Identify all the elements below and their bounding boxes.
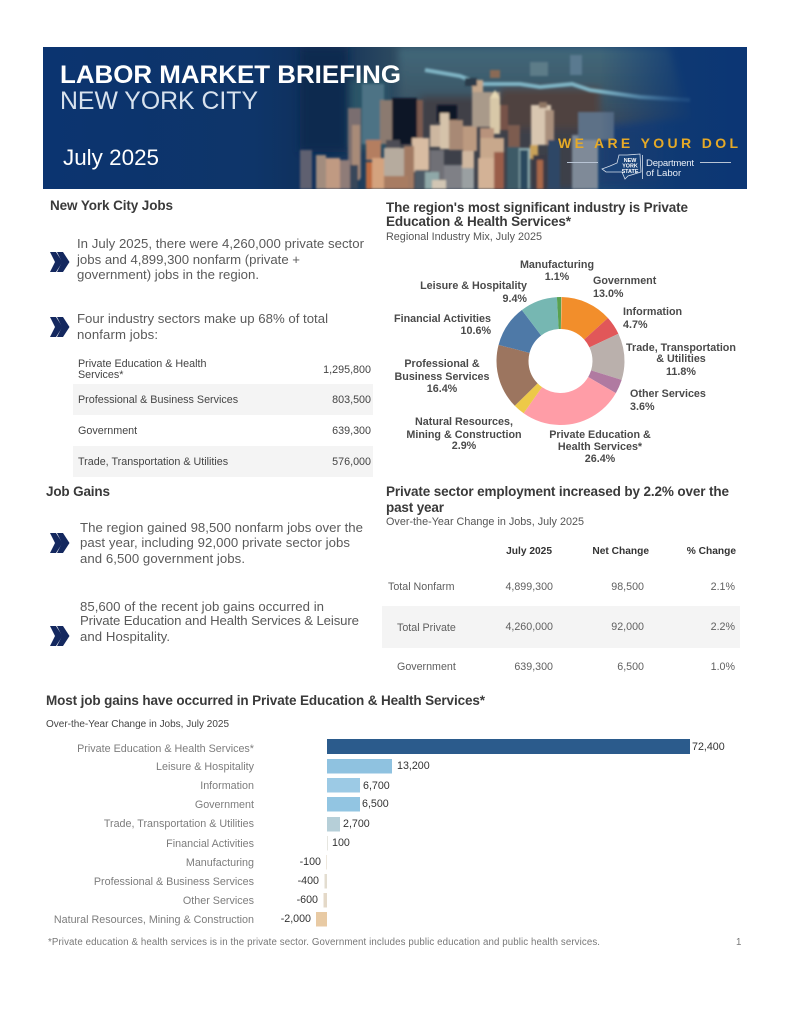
footnote: *Private education & health services is in the private sector. Government includes public education and public health services. — [48, 937, 600, 948]
donut labels: Private Education & — [549, 429, 651, 441]
table: over-the-year change: 2.1% — [711, 581, 735, 593]
panel: private sector employment — [382, 484, 740, 673]
section: New York City Jobs — [50, 198, 373, 477]
donut labels: & Utilities — [656, 353, 706, 365]
icon: chevrons — [50, 317, 70, 337]
heading: New York City Jobs — [50, 198, 173, 213]
banner date: July 2025 — [63, 145, 159, 170]
category labels: Professional & Business Services — [94, 876, 254, 888]
table: top industries: Trade, Transportation & Utilities — [78, 456, 228, 468]
text: recent job gains: and Hospitality. — [80, 629, 170, 644]
value labels: -600 — [297, 894, 318, 906]
table: top industries: 1,295,800 — [323, 364, 371, 376]
text: private and nonfarm jobs: In July 2025, there were 4,260,000 private sector — [77, 236, 365, 251]
donut labels: Manufacturing — [520, 259, 594, 271]
text: private and nonfarm jobs — [76, 236, 365, 282]
text: four industry sectors: Four industry sectors make up 68% of total — [77, 311, 328, 326]
category labels — [54, 743, 255, 926]
text: region gained jobs: and 6,500 government jobs. — [80, 551, 245, 566]
table: over-the-year change: % Change — [687, 546, 736, 557]
text: private and nonfarm jobs: government) jobs in the region. — [77, 267, 259, 282]
donut labels: 10.6% — [461, 325, 491, 337]
donut labels: Trade, Transportation — [626, 342, 736, 354]
heading: past year — [386, 500, 445, 515]
table: over-the-year change: 92,000 — [611, 621, 644, 633]
table: over-the-year change: 1.0% — [711, 661, 735, 673]
donut labels: Professional & — [404, 358, 480, 370]
logo: NY State Department of Labor: of Labor — [646, 168, 682, 179]
table: over-the-year change: Total Nonfarm — [388, 581, 455, 593]
value labels: 13,200 — [397, 760, 430, 772]
donut labels — [394, 259, 736, 465]
category labels: Private Education & Health Services* — [77, 743, 255, 755]
banner subtitle: NEW YORK CITY — [60, 87, 258, 115]
donut labels: Information — [623, 306, 682, 318]
donut labels: 16.4% — [427, 383, 458, 395]
value labels: 100 — [332, 837, 350, 849]
icon: chevrons — [50, 626, 70, 646]
donut labels: 26.4% — [585, 453, 616, 465]
table: top industries: 639,300 — [332, 425, 371, 437]
text: region gained jobs: The region gained 98,500 nonfarm jobs over the — [80, 520, 363, 535]
heading: Education & Health Services* — [386, 214, 572, 229]
logo: NY State Department of Labor: Department — [646, 158, 694, 169]
category labels: Information — [200, 780, 254, 792]
subheading: Over-the-Year Change in Jobs, July 2025 — [46, 719, 229, 730]
value labels — [281, 741, 725, 925]
logo: NY State Department of Labor — [567, 154, 731, 179]
banner — [43, 47, 747, 190]
table: over-the-year change: 2.2% — [711, 621, 735, 633]
table: over-the-year change: 98,500 — [611, 581, 644, 593]
subheading: Regional Industry Mix, July 2025 — [386, 231, 542, 243]
table: over-the-year change — [382, 546, 740, 673]
heading: Most job gains have occurred in Private Education & Health Services* — [46, 693, 486, 708]
table: over-the-year change: July 2025 — [506, 546, 552, 557]
donut chart — [512, 312, 609, 410]
text: recent job gains — [80, 599, 359, 644]
category labels: Natural Resources, Mining & Construction — [54, 914, 254, 926]
value labels: -100 — [300, 856, 321, 868]
donut labels: 13.0% — [593, 288, 624, 300]
donut labels: Mining & Construction — [406, 429, 522, 441]
text: private and nonfarm jobs: jobs and 4,899,300 nonfarm (private + — [76, 252, 300, 267]
category labels: Trade, Transportation & Utilities — [104, 818, 254, 830]
table: top industries: 576,000 — [332, 456, 371, 468]
donut labels: 9.4% — [502, 293, 527, 305]
value labels: 72,400 — [692, 741, 725, 753]
donut labels: Leisure & Hospitality — [420, 280, 527, 292]
banner photo: city skyline — [298, 47, 689, 189]
logo: NY State Department of Labor: STATE — [622, 169, 639, 175]
table: over-the-year change: 4,260,000 — [505, 621, 553, 633]
value labels: 6,500 — [362, 798, 389, 810]
table: over-the-year change: Total Private — [397, 622, 456, 634]
logo: NY State Department of Labor: NEW — [624, 158, 637, 164]
donut labels: Business Services — [394, 371, 490, 383]
text: four industry sectors — [77, 311, 328, 342]
subheading: Over-the-Year Change in Jobs, July 2025 — [386, 516, 584, 528]
table: top industries: 803,500 — [332, 394, 371, 406]
table: top industries — [73, 358, 373, 477]
value labels: -400 — [298, 875, 319, 887]
heading: The region's most significant industry is Private — [386, 200, 688, 215]
heading: Job Gains — [46, 484, 110, 499]
table: over-the-year change: Government — [397, 661, 456, 673]
text: recent job gains: Private Education and Health Services & Leisure — [80, 613, 359, 628]
bar chart — [54, 739, 725, 926]
panel: job gains by industry — [46, 693, 725, 926]
category labels: Financial Activities — [166, 838, 254, 850]
donut labels: 1.1% — [545, 271, 570, 283]
slogan: WE ARE YOUR DOL — [558, 135, 738, 151]
heading: Private sector employment increased by 2.2% over the — [386, 484, 729, 499]
table: over-the-year change: 4,899,300 — [505, 581, 553, 593]
donut labels: Other Services — [630, 388, 706, 400]
donut labels: Government — [593, 275, 657, 287]
panel: industry mix — [386, 200, 736, 465]
table: over-the-year change: 6,500 — [617, 661, 644, 673]
donut labels: Financial Activities — [394, 313, 491, 325]
heading — [386, 200, 688, 229]
value labels: 6,700 — [363, 780, 390, 792]
donut labels: Natural Resources, — [415, 416, 513, 428]
heading — [386, 484, 729, 515]
bars — [316, 739, 690, 926]
table: over-the-year change: Net Change — [592, 546, 649, 557]
logo: NY State Department of Labor: YORK — [622, 164, 638, 170]
donut labels: 2.9% — [452, 440, 477, 452]
table: top industries: Private Education & Health — [78, 358, 206, 370]
icon: chevrons — [50, 252, 70, 272]
category labels: Government — [195, 799, 254, 811]
category labels: Other Services — [183, 895, 254, 907]
table: top industries: Professional & Business Services — [78, 394, 238, 406]
table: over-the-year change: 639,300 — [514, 661, 553, 673]
section: Job Gains — [46, 484, 363, 646]
text: region gained jobs: past year, including 92,000 private sector jobs — [80, 535, 350, 550]
category labels: Leisure & Hospitality — [156, 761, 255, 773]
donut labels: 11.8% — [666, 366, 696, 378]
page number: 1 — [736, 937, 741, 948]
donut labels: 3.6% — [630, 401, 655, 413]
table: top industries: Government — [78, 425, 137, 437]
text: four industry sectors: nonfarm jobs: — [77, 327, 158, 342]
text: region gained jobs — [80, 520, 363, 566]
donut labels: 4.7% — [623, 319, 648, 331]
banner title: LABOR MARKET BRIEFING — [60, 61, 401, 89]
text: recent job gains: 85,600 of the recent job gains occurred in — [80, 599, 324, 614]
value labels: 2,700 — [343, 818, 370, 830]
icon: chevrons — [50, 533, 70, 553]
category labels: Manufacturing — [186, 857, 254, 869]
donut labels: Health Services* — [558, 441, 643, 453]
value labels: -2,000 — [281, 913, 311, 925]
table: top industries: Services* — [78, 369, 124, 381]
